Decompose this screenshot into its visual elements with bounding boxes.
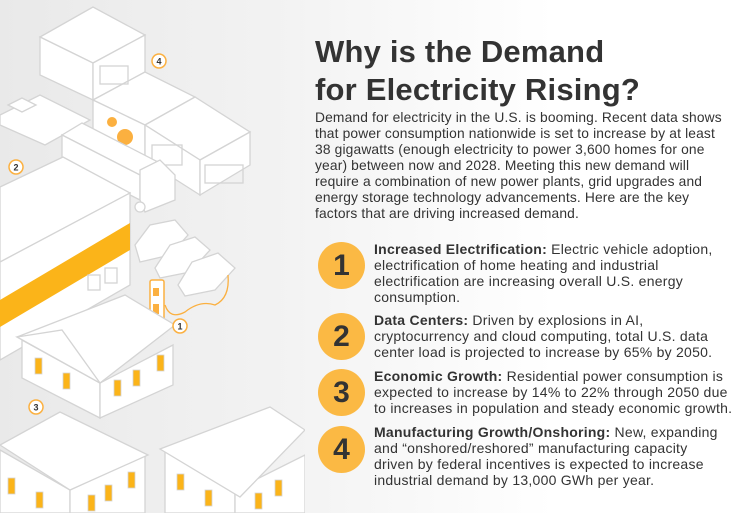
item 4: industrial demand by 13,000 GWh per year. [374, 472, 654, 488]
number markers: 2 [13, 162, 19, 172]
item 4: driven by federal incentives is expected to increase [374, 456, 704, 472]
item 1: consumption. [374, 289, 460, 305]
illustration: city scene [0, 6, 305, 513]
number markers: 4 [156, 56, 162, 66]
intro text: energy storage technology advancements. Here are the key [315, 190, 689, 205]
item 2: Data Centers: Driven by explosions in AI, [374, 312, 643, 328]
item 2: center load is projected to increase by 65% by 2050. [374, 344, 712, 360]
item 4 [318, 424, 718, 488]
intro text: require a combination of new power plants, grid upgrades and [315, 174, 702, 189]
item 1: electrification of home heating and industrial [374, 257, 659, 273]
number markers: 1 [177, 322, 183, 332]
item 2: 2 [333, 320, 350, 353]
item 1: electrification are increasing overall U.S. energy [374, 273, 683, 289]
item 1: Increased Electrification: Electric vehicle adoption, [374, 241, 713, 257]
title: for Electricity Rising? [315, 72, 640, 107]
item 3: to increases in population and steady economic growth. [374, 400, 732, 416]
windows [8, 355, 282, 511]
cars [135, 220, 235, 296]
item 2: cryptocurrency and cloud computing, total U.S. data [374, 328, 708, 344]
house 1 [17, 295, 175, 418]
item 3 [318, 368, 732, 416]
item 3: 3 [333, 376, 350, 409]
intro text: factors that are driving increased demand. [315, 206, 579, 221]
number markers: 3 [33, 402, 39, 412]
title: Why is the Demand [315, 34, 604, 69]
title [315, 34, 640, 107]
intro text: that power consumption nationwide is set to increase by at least [315, 126, 715, 141]
intro text: Demand for electricity in the U.S. is booming. Recent data shows [315, 110, 722, 125]
item 3: Economic Growth: Residential power consumption is [374, 368, 723, 384]
truck [62, 123, 175, 212]
item 4: and “onshored/reshored” manufacturing capacity [374, 440, 687, 456]
gears [107, 117, 133, 145]
item 1: 1 [333, 249, 350, 282]
house 2 [0, 412, 148, 513]
intro text [315, 110, 722, 221]
house 3 [160, 407, 305, 513]
item 4: 4 [333, 433, 350, 466]
intro text: year) between now and 2028. Meeting this new demand will [315, 158, 689, 173]
item 4: Manufacturing Growth/Onshoring: New, expanding [374, 424, 718, 440]
icon: EV charger [150, 275, 228, 324]
number markers [9, 54, 187, 414]
big data center [0, 157, 130, 360]
warehouse loading area [0, 95, 90, 145]
item 3: expected to increase by 14% to 22% through 2050 due [374, 384, 728, 400]
building 4: manufacturing [40, 7, 250, 195]
item 1 [318, 241, 713, 305]
item 2 [318, 312, 712, 360]
intro text: 38 gigawatts (enough electricity to power 3,600 homes for one [315, 142, 705, 157]
